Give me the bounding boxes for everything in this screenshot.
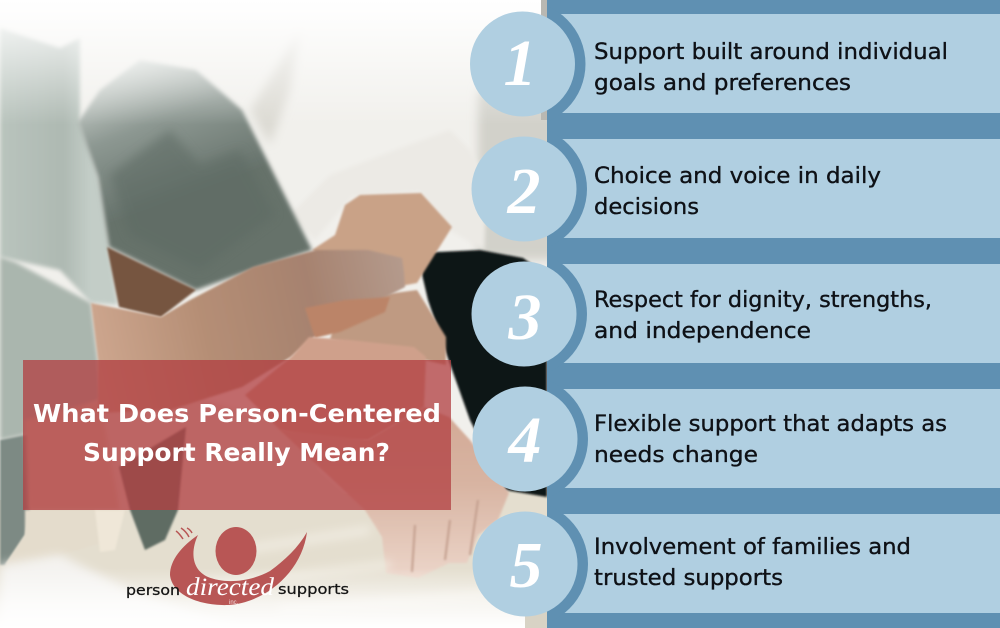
title banner — [23, 360, 451, 510]
card 4: 4 — [506, 404, 542, 477]
logo: person directed supports: directed — [186, 574, 275, 601]
card 3: Respect for dignity, strengths, — [594, 288, 932, 313]
logo: person directed supports: supports — [278, 582, 349, 598]
photo: two people holding hands — [0, 0, 558, 628]
logo: person directed supports: person — [126, 583, 180, 599]
card 3 — [472, 262, 1000, 366]
title banner: What Does Person-Centered — [33, 399, 441, 428]
card 5: 5 — [510, 529, 542, 602]
card 2: 2 — [506, 155, 540, 228]
title banner: Support Really Mean? — [83, 438, 390, 467]
logo: person directed supports — [126, 527, 349, 606]
card 2: decisions — [594, 195, 699, 220]
card 3: and independence — [594, 319, 811, 344]
card 4: needs change — [594, 443, 758, 468]
card 5: Involvement of families and — [594, 535, 911, 560]
logo: person directed supports: inc. — [229, 600, 239, 606]
card 1: goals and preferences — [594, 71, 851, 96]
card 2 — [472, 136, 1000, 242]
card 1: 1 — [504, 27, 536, 100]
card 1: Support built around individual — [594, 40, 948, 65]
panel: right blue column — [547, 0, 1000, 628]
card 5: trusted supports — [594, 566, 783, 591]
card 3: 3 — [508, 281, 542, 354]
card 4 — [472, 386, 1000, 492]
card 1 — [470, 12, 1000, 116]
card 4: Flexible support that adapts as — [594, 412, 947, 437]
card 2: Choice and voice in daily — [594, 164, 881, 189]
card 5 — [472, 512, 1000, 616]
